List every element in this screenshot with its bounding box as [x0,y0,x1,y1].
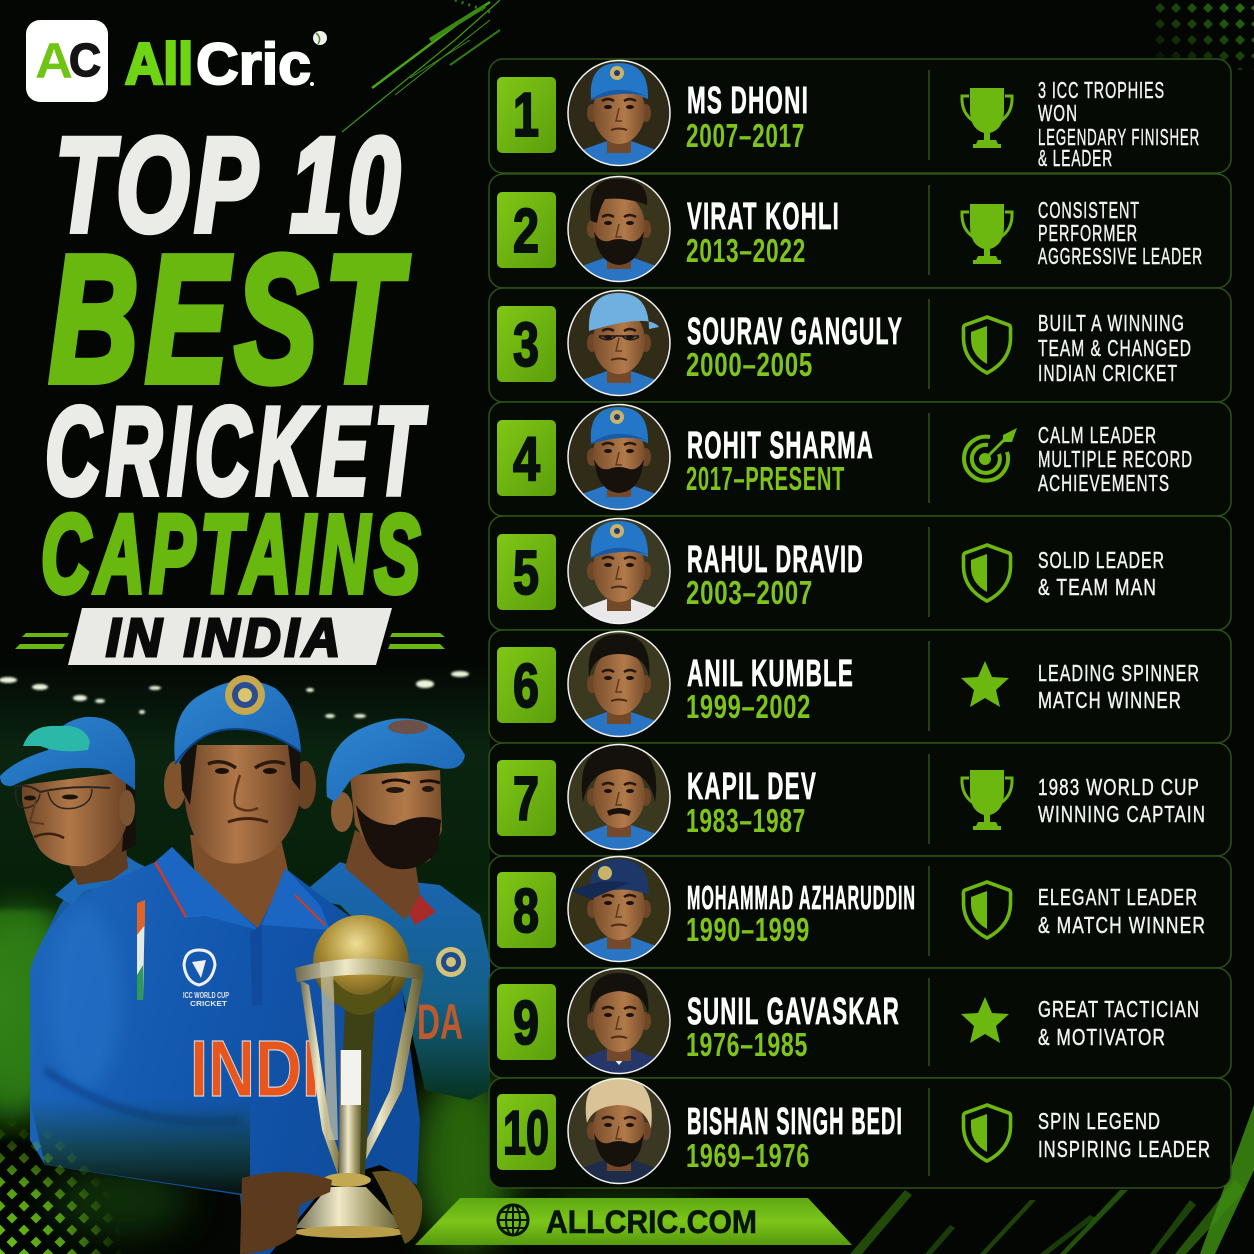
website text: ALLCRIC.COM [546,1204,757,1240]
row 4 description: ACHIEVEMENTS [1038,470,1170,496]
row 7 rank [497,760,556,836]
row 4 description [1038,422,1193,496]
hero: shirt logo [183,950,229,1008]
row 7 description [1038,774,1206,827]
row 6 rank [497,647,556,723]
row 6 name: ANIL KUMBLE [687,653,854,695]
row 8 panel [489,856,1231,968]
title banner: IN INDIA: IN INDIA [106,608,344,668]
logo wordmark [125,31,327,97]
row 5 description [1038,547,1165,600]
row 8 rank [497,872,556,948]
row 10: Bishan Singh Bedi [489,1077,1231,1191]
row 1 icon: trophy [962,88,1012,148]
row 10 rank [497,1094,556,1170]
row 9 rank: 9 [513,989,539,1058]
row 2 name: VIRAT KOHLI [687,196,840,238]
row 5 rank: 5 [513,539,539,608]
row 4 rank [497,420,556,496]
row 6 icon: star [961,661,1009,707]
row 4 years: 2017–PRESENT [686,460,845,497]
icon: globe [498,1205,528,1235]
row 2: Virat Kohli [489,174,1231,289]
title [15,111,445,668]
row 1 name: MS DHONI [687,80,809,122]
row 6 portrait [567,630,671,744]
row 10 panel [489,1078,1231,1188]
row 9 description: & MOTIVATOR [1038,1024,1166,1050]
row 3 rank: 3 [513,311,539,380]
row 5 name: RAHUL DRAVID [687,539,864,581]
row 5 description: & TEAM MAN [1038,574,1157,600]
row 3 name: SOURAV GANGULY [687,311,903,353]
row 5 icon: shield [963,545,1011,601]
row 2 description: CONSISTENT [1038,197,1140,223]
halftone diamonds bottom left [0,1122,120,1254]
row 4 name: ROHIT SHARMA [687,425,874,467]
hero: centre captain [30,675,420,1254]
row 1 rank [497,77,556,153]
row 7 portrait [567,743,671,857]
hero: right captain [298,718,490,1100]
title line: CAPTAINS: CAPTAINS [41,493,425,616]
row 9 years: 1976–1985 [686,1026,808,1063]
row 1 description: & LEADER [1038,145,1113,171]
row 9 rank [497,984,556,1060]
row 10 description [1038,1108,1211,1162]
row 7 name: KAPIL DEV [687,766,817,808]
logo icon [26,20,108,102]
row 5 years: 2003–2007 [686,574,813,611]
row 7 rank: 7 [513,765,539,834]
row 1 rank: 1 [513,81,539,150]
row 6: Anil Kumble [489,630,1231,744]
logo icon: C [69,34,101,86]
title line: BEST: BEST [49,219,409,420]
row 1 description [1038,77,1200,171]
row 7 description: 1983 WORLD CUP [1038,774,1200,800]
row 10 name: BISHAN SINGH BEDI [687,1101,903,1143]
row 8 icon: shield [963,882,1011,938]
green paint strokes bottom right [850,1105,1254,1254]
row 3: Sourav Ganguly [489,288,1231,403]
row 6 description: MATCH WINNER [1038,687,1182,713]
row 7: Kapil Dev [489,743,1231,857]
row 3 icon: shield [963,317,1011,373]
row 4 panel [489,402,1231,516]
row 8 rank: 8 [513,877,539,946]
row 7 icon: trophy [962,770,1012,830]
row 10 years: 1969–1976 [686,1137,810,1174]
row 8 portrait [567,855,671,969]
row 4 rank: 4 [513,425,540,494]
hero: right captain: DA [417,994,463,1050]
row 3 panel [489,288,1231,402]
row 6 rank: 6 [513,652,539,721]
row 6 panel [489,630,1231,743]
halftone dots top right [1150,0,1254,70]
hero: shirt logo: CRICKET [190,1001,228,1008]
logo icon: A [35,33,73,89]
green paint splash top [342,0,500,132]
row 4 portrait [567,403,671,517]
row 5 panel [489,516,1231,630]
row 5 rank [497,534,556,610]
footer banner: website [415,1198,852,1245]
row 2 rank: 2 [513,197,539,266]
captain list panels [489,59,1231,1191]
row 1 years: 2007–2017 [686,117,805,154]
row 5 portrait [567,517,671,631]
row 8: Mohammad Azharuddin: MOHAMMAD AZHARUDDIN [687,879,916,916]
row 10 description: SPIN LEGEND [1038,1108,1161,1134]
row 5: Rahul Dravid [489,516,1231,631]
row 5 description: SOLID LEADER [1038,547,1165,573]
background: green grass glow [0,910,710,1250]
row 1: MS Dhoni [489,59,1231,173]
row 8 description [1038,884,1206,938]
row 8 years: 1990–1999 [686,911,810,948]
row 9 panel [489,968,1231,1078]
row 3 rank [497,306,556,382]
row 7 panel [489,743,1231,856]
hero: world cup trophy [294,915,424,1238]
row 2 description [1038,197,1203,269]
row 3 years: 2000–2005 [686,346,813,383]
row 2 panel [489,174,1231,288]
row 2 icon: trophy [962,204,1012,264]
row 4: Rohit Sharma [489,402,1231,517]
title line: TOP 10: TOP 10 [55,111,405,260]
row 3 description [1038,310,1192,386]
row 3 portrait [567,289,671,403]
hero: hands [240,1171,422,1254]
row 10 icon: shield [963,1105,1011,1161]
row 8: Mohammad Azharuddin [489,855,1231,969]
title banner: IN INDIA [15,608,445,668]
row 1 portrait [567,59,671,173]
row 9 portrait [567,967,671,1081]
row 9 name: SUNIL GAVASKAR [687,991,900,1033]
row 1 panel [489,59,1231,173]
row 2 years: 2013–2022 [686,232,806,269]
row 9 icon: star [961,997,1009,1043]
row 9 description [1038,996,1200,1050]
row 6 years: 1999–2002 [686,688,811,725]
row 10 rank: 10 [503,1099,549,1168]
title line: CRICKET: CRICKET [45,383,427,521]
logo: AllCric [26,20,327,102]
row 10 portrait [567,1077,671,1191]
background: stadium with floodlights [0,660,490,960]
row 2 rank [497,192,556,268]
row 4 description: CALM LEADER [1038,422,1157,448]
row 2 portrait [567,175,671,289]
row 3 description: BUILT A WINNING [1038,310,1185,336]
row 3 description: INDIAN CRICKET [1038,360,1178,386]
logo wordmark: All [125,32,193,97]
row 7 years: 1983–1987 [686,802,806,839]
row 4 icon: target [964,428,1017,481]
row 1 description: 3 ICC TROPHIES [1038,77,1165,103]
row 8 description: & MATCH WINNER [1038,912,1206,938]
hero: INDIA chest text: INDI [190,1024,320,1113]
logo wordmark: Cric [196,32,311,97]
row 6 description [1038,660,1200,713]
hero: shirt logo: ICC WORLD CUP [183,991,229,1000]
row 1 description: WON [1038,100,1078,126]
row 2 description: PERFORMER [1038,220,1138,246]
row 9: Sunil Gavaskar [489,967,1231,1081]
hero: three captains with trophy [0,675,490,1254]
hero: left captain [0,717,148,1040]
